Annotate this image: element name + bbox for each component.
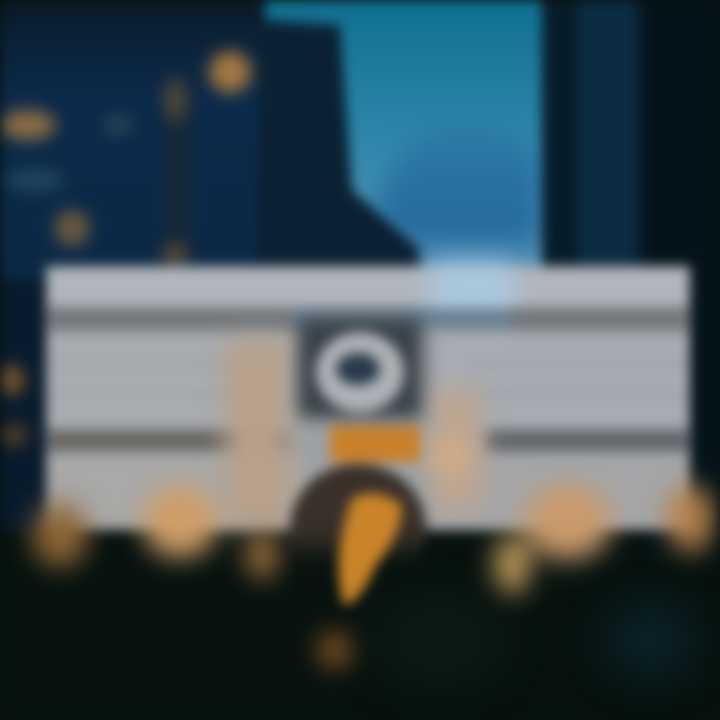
sky: [262, 0, 552, 280]
right towers: [542, 0, 720, 560]
warm bokeh lights: [32, 437, 714, 668]
orange band: [330, 426, 420, 462]
distant mountain: [375, 124, 540, 275]
central panel: [46, 262, 690, 530]
warm tint: [225, 340, 482, 525]
central icon: [290, 318, 426, 592]
lock arch: [290, 464, 426, 592]
right row stripes: [470, 362, 688, 396]
icon frame: [298, 318, 422, 418]
icon centre: [336, 353, 380, 385]
top header bar: [48, 268, 688, 304]
window lights: [0, 51, 251, 445]
lower right block: [430, 458, 688, 530]
panel base: [46, 266, 690, 530]
left row block: [48, 336, 293, 426]
bottom glints: [375, 595, 695, 685]
dark divider top: [48, 308, 688, 330]
left row stripes: [48, 362, 248, 396]
header highlight: [430, 262, 515, 322]
foreground dark foliage: [0, 535, 720, 720]
right row block: [436, 336, 688, 426]
icon ring: [316, 332, 404, 412]
lower left block: [48, 458, 303, 530]
left buildings: [0, 0, 420, 530]
lock glow: [339, 493, 402, 606]
dark divider bottom: [48, 430, 688, 451]
